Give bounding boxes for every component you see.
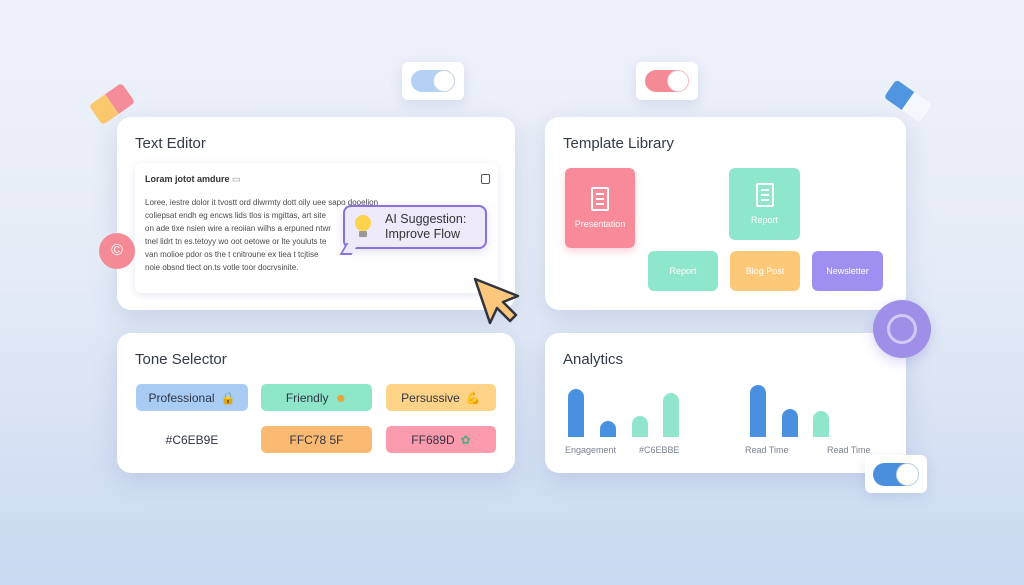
heading: text editor: Text Editor (135, 135, 206, 152)
template: report top (729, 168, 800, 240)
chip: hex orange (261, 426, 372, 453)
template: report top: Report (751, 215, 778, 225)
chip: hex pink: ✿ (461, 432, 471, 446)
bar chart: #C6EBBE (639, 445, 680, 455)
body text: tnel lidrt tn es.tetoyy wo oot oetowe or lte youluts te (145, 237, 326, 246)
editor heading: Loram jotot amdure ▭ (145, 174, 241, 184)
decoration: eraser blue/white (885, 80, 930, 121)
body text: Loree, iestre dolor it tvostt ord diwrmty dott oily uee sapo dooelion (145, 198, 378, 207)
heading: tone selector: Tone Selector (135, 351, 227, 368)
callout text: Improve Flow (385, 227, 460, 241)
callout: AI suggestion (343, 205, 487, 249)
heading: template library: Template Library (563, 135, 674, 152)
toggle: bottom right (865, 455, 927, 493)
icon: cursor (474, 278, 520, 324)
template: blog post: Blog Post (746, 266, 784, 276)
heading: analytics: Analytics (563, 351, 623, 368)
chip: hex pink (386, 426, 496, 453)
icon: lightbulb (355, 215, 371, 231)
bar chart: Read Time (827, 445, 871, 455)
toggle: top blue (402, 62, 464, 100)
body text (145, 198, 378, 272)
chip: professional: 🔒 (221, 390, 236, 404)
template: report: Report (669, 266, 696, 276)
icon: purple ring (873, 300, 931, 358)
body text: noie obsnd tiect on.ts votle toor docrvsinite. (145, 263, 298, 272)
chip: hex orange: FFC78 5F (289, 432, 344, 446)
toggle: top pink (636, 62, 698, 100)
chip: hex pink: FF689D (411, 432, 455, 446)
panel: analytics (545, 333, 906, 473)
chip: professional (136, 384, 248, 411)
chip: friendly: Friendly (286, 390, 329, 404)
callout tail (340, 243, 358, 255)
chip: persuasive: Persussive (401, 390, 460, 404)
icon: save (481, 174, 490, 184)
panel: text editor (117, 117, 515, 310)
template: blog post (730, 251, 800, 291)
icon: pink circle badge: © (111, 242, 123, 259)
decoration: eraser pink/yellow (90, 84, 134, 124)
chip: persuasive: 💪 (466, 390, 481, 404)
bar chart (565, 385, 871, 455)
callout text (385, 212, 466, 241)
editor box (135, 163, 498, 293)
template: presentation: Presentation (575, 219, 625, 229)
body text: van molioe pdor os the t cnitroune ex tiea t tcjtise (145, 250, 318, 259)
template: presentation (565, 168, 635, 248)
callout text: AI Suggestion: (385, 212, 466, 226)
chip: hex green: #C6EB9E (166, 432, 218, 446)
chip: persuasive (386, 384, 496, 411)
panel: tone selector (117, 333, 515, 473)
bar chart: Read Time (745, 445, 789, 455)
chip: friendly (261, 384, 372, 411)
template: newsletter (812, 251, 883, 291)
body text: coliepsat endh eg encws lids tlos is mgittas, art site (145, 211, 326, 220)
template: newsletter: Newsletter (826, 266, 869, 276)
panel: template library (545, 117, 906, 310)
icon: pink circle badge (99, 233, 135, 269)
chip: friendly: ☻ (335, 390, 347, 404)
template: report (648, 251, 718, 291)
chip: professional: Professional (148, 390, 215, 404)
body text: on ade tixe nsien wire a reoiian wilhs a erpuned ntwr (145, 224, 331, 233)
bar chart: Engagement (565, 445, 616, 455)
